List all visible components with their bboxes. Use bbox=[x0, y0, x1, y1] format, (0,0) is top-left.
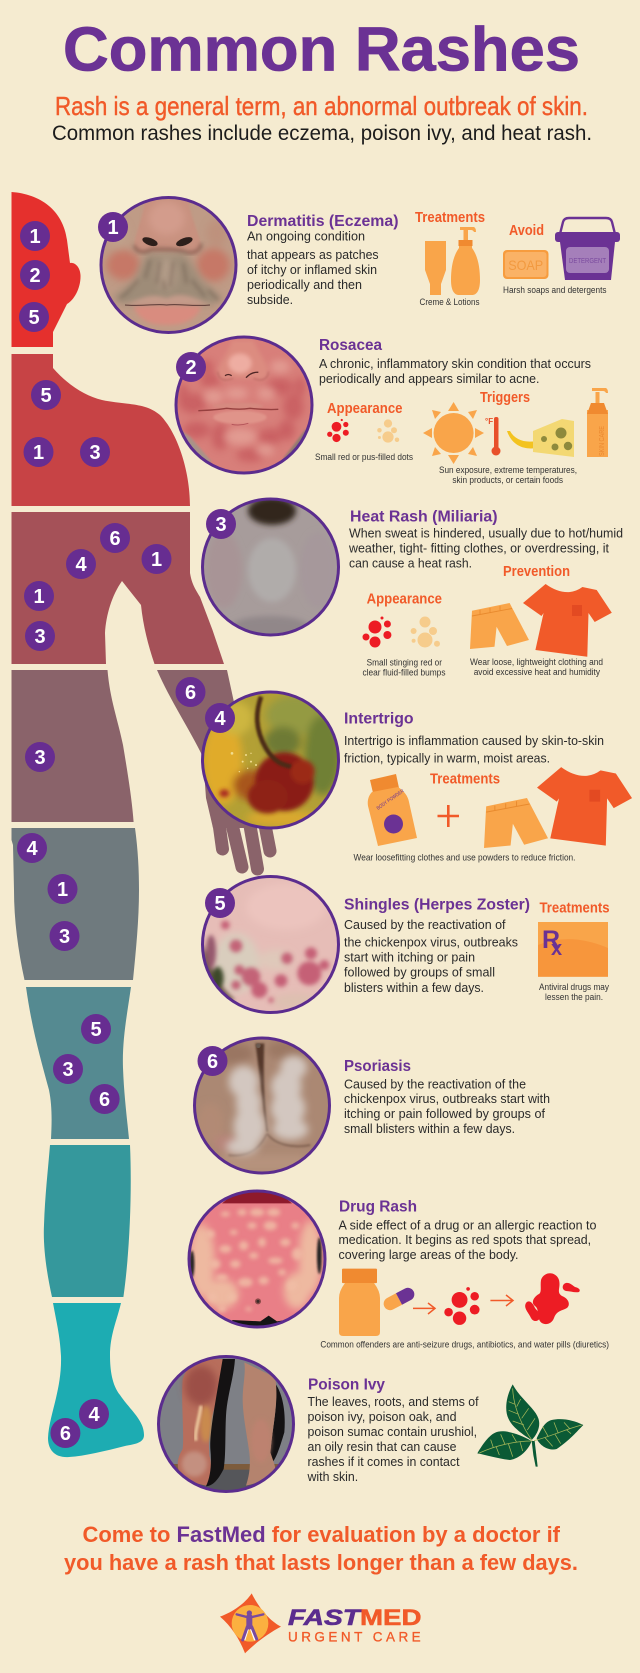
logo: FastMed Urgent Care bbox=[220, 1593, 422, 1653]
description bbox=[344, 734, 604, 765]
call to action: you have a rash that lasts longer than a few days. bbox=[64, 1550, 578, 1575]
arrow bbox=[413, 1303, 435, 1314]
description: A side effect of a drug or an allergic reaction to bbox=[338, 1218, 597, 1232]
description: blisters within a few days. bbox=[344, 981, 484, 995]
arrow bbox=[490, 1295, 513, 1306]
body segment: head: 1 bbox=[29, 226, 41, 248]
caption: prevention bbox=[470, 657, 603, 677]
icon: prescription pad bbox=[538, 922, 608, 977]
body segment: head bbox=[12, 192, 81, 347]
icon: lotion bottle bbox=[451, 227, 480, 295]
heading: Poison Ivy bbox=[308, 1377, 385, 1394]
icon: cheese bbox=[533, 419, 574, 457]
heading: Drug Rash bbox=[339, 1199, 417, 1216]
caption: shingles treatment: Antiviral drugs may bbox=[539, 982, 610, 992]
photo: rosacea face bbox=[174, 336, 314, 474]
body segment: upper thigh bbox=[12, 828, 139, 980]
icon: prescription pad: R bbox=[542, 926, 560, 954]
description: covering large areas of the body. bbox=[338, 1248, 518, 1262]
description: Intertrigo is inflammation caused by skin-to-skin bbox=[344, 734, 604, 748]
icon: red bumps bbox=[362, 616, 391, 648]
caption: appearance: clear fluid-filled bumps bbox=[362, 668, 446, 678]
description: periodically and then bbox=[247, 278, 362, 292]
panel: heat rash bbox=[200, 495, 623, 678]
description: chickenpox virus, outbreaks start with bbox=[344, 1092, 550, 1106]
icon: prescription pad: x bbox=[551, 938, 562, 960]
body segment: shoulder: 5 bbox=[40, 385, 52, 407]
description: that appears as patches bbox=[247, 248, 379, 262]
body segment: shoulder: 3 bbox=[89, 442, 101, 464]
caption: triggers: Sun exposure, extreme temperatures, bbox=[439, 465, 577, 475]
body segment: upper thigh: 3 bbox=[59, 926, 70, 948]
description: periodically and appears similar to acne. bbox=[319, 372, 540, 386]
photo: shingles: 5 bbox=[214, 893, 226, 915]
treatments heading: Treatments bbox=[415, 210, 485, 226]
description: start with itching or pain bbox=[344, 951, 475, 965]
icon: pill bottle bbox=[339, 1269, 380, 1336]
description bbox=[307, 1395, 479, 1484]
caption: appearance: Small red or pus-filled dots bbox=[315, 452, 414, 462]
icon: shorts bbox=[470, 603, 529, 649]
panel: psoriasis bbox=[187, 1030, 550, 1180]
icon: skin care bottle: SKIN CARE bbox=[597, 426, 606, 456]
icon: soap bbox=[503, 250, 548, 279]
icon: t-shirt bbox=[523, 584, 612, 657]
body segment: knee: 3 bbox=[62, 1059, 74, 1081]
icon: creme tube bbox=[425, 241, 446, 295]
triggers heading: Triggers bbox=[480, 390, 530, 406]
caption: triggers bbox=[439, 465, 577, 485]
heading: Shingles (Herpes Zoster) bbox=[344, 896, 530, 913]
caption: prevention: avoid excessive heat and humidity bbox=[474, 667, 601, 677]
icon: fluid-filled bumps bbox=[411, 616, 440, 648]
body segment: knee bbox=[26, 987, 131, 1139]
icon: sun bbox=[423, 402, 484, 464]
photo: heat rash chest: 3 bbox=[215, 514, 227, 536]
description: An ongoing condition bbox=[247, 230, 365, 244]
icon: t-shirt bbox=[537, 767, 632, 846]
body segment: knee: 6 bbox=[99, 1089, 110, 1111]
heading: Dermatitis (Eczema) bbox=[247, 213, 398, 230]
photo: psoriasis: 6 bbox=[207, 1051, 218, 1073]
description: Caused by the reactivation of the bbox=[344, 1077, 526, 1091]
body segment: chest and upper arm: 1 bbox=[151, 549, 162, 571]
description: itching or pain followed by groups of bbox=[344, 1107, 546, 1121]
body segment: knee: 5 bbox=[90, 1019, 102, 1041]
photo: drug rash bbox=[188, 1190, 326, 1328]
caption: harsh soaps: Harsh soaps and detergents bbox=[503, 285, 607, 295]
call to action bbox=[64, 1522, 578, 1575]
body segment: upper thigh: 1 bbox=[57, 879, 68, 901]
photo: dermatitis face: 1 bbox=[107, 217, 119, 239]
description: weather, tight- fitting clothes, or overdressing, it bbox=[348, 542, 610, 556]
description: subside. bbox=[247, 293, 293, 307]
icon: banana bbox=[507, 431, 536, 448]
treatments heading: Treatments bbox=[430, 772, 500, 788]
caption: creme and lotions: Creme & Lotions bbox=[420, 297, 480, 307]
description bbox=[247, 230, 379, 307]
icon: detergent bucket bbox=[555, 218, 620, 280]
description: of itchy or inflamed skin bbox=[247, 263, 377, 277]
body segment: chest and upper arm bbox=[12, 512, 224, 664]
body segment: chest and upper arm: 1 bbox=[33, 586, 45, 608]
description: followed by groups of small bbox=[344, 966, 495, 980]
icon: thermometer bbox=[485, 417, 500, 456]
caption: appearance: Small stinging red or bbox=[367, 658, 442, 668]
panel: poison ivy bbox=[151, 1349, 583, 1500]
panel: shingles bbox=[196, 870, 610, 1020]
call to action: Come to FastMed for evaluation by a doctor if bbox=[82, 1522, 561, 1547]
icon: skin care bottle bbox=[587, 388, 608, 457]
body segment: foot: 6 bbox=[60, 1423, 71, 1445]
treatments heading: Treatments bbox=[540, 901, 610, 917]
heading: Rosacea bbox=[319, 337, 382, 354]
caption: shingles treatment bbox=[539, 982, 610, 1002]
panel: drug rash bbox=[182, 1184, 609, 1350]
photo: dermatitis face bbox=[98, 196, 238, 334]
caption: intertrigo treatment: Wear loosefitting clothes and use powders to reduce friction. bbox=[354, 853, 576, 863]
caption: prevention: Wear loose, lightweight clothing and bbox=[470, 657, 603, 667]
icon: poison ivy leaves bbox=[477, 1384, 583, 1467]
description: When sweat is hindered, usually due to hot/humid bbox=[349, 527, 623, 541]
body segment: chest and upper arm: 4 bbox=[75, 554, 87, 576]
icon: capsule bbox=[381, 1286, 417, 1312]
heading: Intertrigo bbox=[344, 711, 414, 728]
body segment: calf bbox=[44, 1145, 131, 1297]
description bbox=[344, 1077, 550, 1136]
logo text: Fast: FAST bbox=[288, 1605, 362, 1630]
body segment: head: 2 bbox=[29, 265, 41, 287]
caption: triggers: skin products, or certain foods bbox=[452, 475, 564, 485]
body segment: chest and upper arm: 6 bbox=[109, 528, 121, 550]
photo: psoriasis bbox=[193, 1036, 331, 1174]
description: small blisters within a few days. bbox=[344, 1122, 515, 1136]
prevention heading: Prevention bbox=[503, 564, 570, 580]
heading: Psoriasis bbox=[344, 1058, 411, 1075]
body segment: shoulder: 1 bbox=[33, 442, 44, 464]
description: poison ivy, poison oak, and bbox=[308, 1410, 457, 1424]
icon: detergent bucket: DETERGENT bbox=[569, 258, 607, 265]
logo text: Urgent Care: URGENT CARE bbox=[288, 1630, 421, 1645]
heading: Heat Rash (Miliaria) bbox=[350, 509, 498, 526]
description bbox=[338, 1218, 597, 1262]
caption: shingles treatment: lessen the pain. bbox=[545, 992, 603, 1002]
body segment: head: 5 bbox=[28, 307, 40, 329]
icon: spreading rash splat bbox=[525, 1273, 580, 1324]
photo: rosacea face: 2 bbox=[185, 357, 197, 379]
description: an oily resin that can cause bbox=[308, 1440, 457, 1454]
body segment: forearm and hand: 6 bbox=[185, 682, 196, 704]
panel: intertrigo bbox=[196, 685, 632, 863]
description bbox=[319, 357, 591, 386]
body segment: shoulder bbox=[12, 354, 190, 506]
body segment: forearm and hand bbox=[157, 670, 273, 869]
description bbox=[348, 527, 623, 571]
body segment: foot bbox=[48, 1303, 144, 1457]
icon: red dots bbox=[327, 419, 349, 442]
description: can cause a heat rash. bbox=[349, 557, 472, 571]
photo: shingles bbox=[201, 875, 340, 1014]
plus sign bbox=[438, 805, 459, 827]
description: Caused by the reactivation of bbox=[344, 918, 506, 932]
logo text: Med: MED bbox=[360, 1605, 422, 1630]
description: The leaves, roots, and stems of bbox=[308, 1395, 479, 1409]
subtitle: examples: Common rashes include eczema, poison ivy, and heat rash. bbox=[52, 121, 592, 145]
photo: poison ivy legs bbox=[157, 1355, 295, 1493]
icon: red spots bbox=[444, 1287, 480, 1325]
body segment: upper thigh: 4 bbox=[26, 838, 38, 860]
icon: shorts bbox=[484, 798, 548, 848]
description: rashes if it comes in contact bbox=[308, 1455, 460, 1469]
description: with skin. bbox=[307, 1470, 358, 1484]
photo: heat rash chest bbox=[200, 495, 345, 640]
caption: appearance bbox=[362, 658, 446, 678]
description: poison sumac contain urushiol, bbox=[308, 1425, 477, 1439]
icon: thermometer: °F bbox=[485, 417, 493, 426]
body segment: abdomen: 3 bbox=[34, 747, 46, 769]
appearance heading: Appearance bbox=[327, 401, 402, 417]
logo mark bbox=[220, 1593, 281, 1653]
body segment: chest and upper arm: 3 bbox=[34, 626, 46, 648]
body figure: segmented silhouette with rash numbers bbox=[12, 192, 273, 1457]
panel: dermatitis bbox=[95, 190, 620, 340]
photo: intertrigo: 4 bbox=[214, 708, 226, 730]
icon: body powder bottle: BODY POWDER bbox=[376, 788, 406, 812]
panel: rosacea bbox=[170, 330, 608, 485]
description: medication. It begins as red spots that spread, bbox=[338, 1233, 591, 1247]
photo: intertrigo bbox=[201, 690, 340, 830]
body segment: foot: 4 bbox=[88, 1404, 100, 1426]
icon: soap: SOAP bbox=[508, 257, 543, 273]
icon: pus-filled dots bbox=[377, 419, 399, 443]
body segment: abdomen bbox=[12, 670, 134, 822]
description: A chronic, inflammatory skin condition that occurs bbox=[319, 357, 591, 371]
avoid heading: Avoid bbox=[509, 223, 544, 239]
description: friction, typically in warm, moist areas. bbox=[344, 751, 550, 765]
icon: body powder bottle bbox=[368, 774, 417, 846]
description: the chickenpox virus, outbreaks bbox=[344, 936, 518, 950]
title: Common Rashes bbox=[63, 16, 580, 84]
caption: common offenders: Common offenders are anti-seizure drugs, antibiotics, and water pills (diuretics) bbox=[320, 1340, 609, 1350]
description bbox=[344, 918, 518, 995]
appearance heading: Appearance bbox=[367, 592, 442, 608]
